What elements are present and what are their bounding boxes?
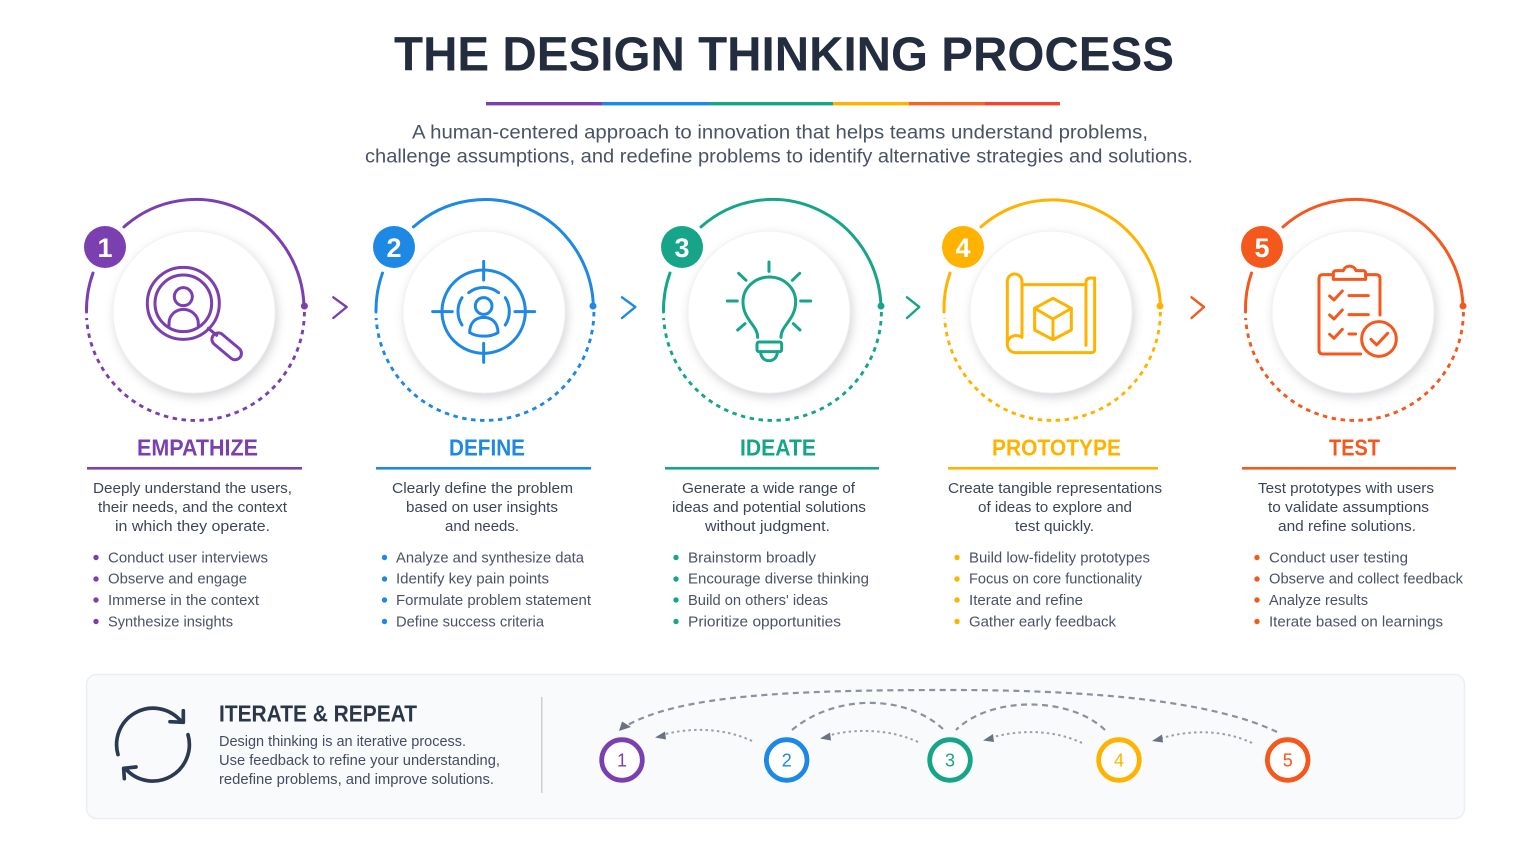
node 1: 1 [617,750,627,770]
inner disc 1 [113,231,275,393]
bullet list 2: Identify key pain points [396,572,549,588]
bullet list 1: Observe and engage [108,572,247,588]
node 3: 3 [945,750,955,770]
bullet list 4 [954,550,1150,630]
description 4: Create tangible representations [948,480,1162,497]
arrow 3 to 4 [907,297,919,318]
badge 4 [942,226,984,268]
bullet list 5 [1254,550,1464,630]
description: iterate: Design thinking is an iterative process. [219,734,466,750]
ring 1 [86,199,308,420]
arc 3 to 2 [792,703,943,730]
bullet list 2: Formulate problem statement [396,593,591,609]
description 2: Clearly define the problem [392,480,573,497]
panel: step 3 ideate [661,199,884,630]
bullet list 4: Build low-fidelity prototypes [969,550,1150,566]
description 2: and needs. [445,518,519,535]
description: iterate: Use feedback to refine your understanding, [219,753,500,769]
bullet list 1: Conduct user interviews [108,550,268,566]
underline 4 [948,467,1158,470]
description 5: to validate assumptions [1268,499,1429,516]
description 3: without judgment. [704,518,830,535]
badge 2 [373,226,415,268]
node 4 [1099,740,1139,780]
ring 3 [663,199,884,420]
bullet list 2: Define success criteria [396,614,545,630]
description 1: in which they operate. [115,518,270,535]
bullet list 1: Synthesize insights [108,614,233,630]
subtitle: A human-centered approach to innovation that helps teams understand problems, [412,123,1148,144]
long arc 5 to 1 [619,690,1277,732]
heading: define: DEFINE [449,434,525,460]
heading: iterate and repeat: ITERATE & REPEAT [219,700,417,726]
inner disc 3 [688,231,850,393]
badge 3 [661,226,703,268]
description 1 [93,480,292,535]
description 4: of ideas to explore and [978,499,1132,516]
description 1: Deeply understand the users, [93,480,292,497]
node 3 [930,740,970,780]
description: iterate [219,734,500,788]
description 5 [1258,480,1434,535]
heading: test: TEST [1329,434,1380,460]
icon: refresh loop [117,708,189,781]
description 4: test quickly. [1015,518,1094,535]
bullet list 5: Conduct user testing [1269,550,1408,566]
description 3 [672,480,866,535]
panel background [86,674,1464,818]
node 1 [602,740,642,780]
ring 2 [376,200,596,420]
node 4: 4 [1114,750,1124,770]
bullet list 3: Prioritize opportunities [688,614,841,630]
badge 1 [84,226,126,268]
node 5 [1267,740,1308,780]
badge 3: 3 [674,233,690,263]
badge 5 [1241,226,1283,268]
subtitle: challenge assumptions, and redefine problems to identify alternative strategies and solutions. [365,147,1193,168]
description 5: and refine solutions. [1278,518,1416,535]
dotted arrow 3 to 2 [820,731,918,742]
description 5: Test prototypes with users [1258,480,1434,497]
panel: step 4 prototype [942,200,1164,630]
panel: step 2 define [373,200,596,630]
panel: step 1 empathize [84,199,308,630]
inner disc 4 [970,231,1132,393]
description 3: Generate a wide range of [682,480,856,497]
inner disc 5 [1272,231,1434,393]
heading: prototype: PROTOTYPE [992,434,1121,460]
bullet list 1 [93,550,268,630]
loop diagram [602,690,1308,780]
arrow 1 to 2 [333,297,347,318]
node 2 [766,740,807,780]
bullet list 4: Gather early feedback [969,614,1117,630]
bullet list 1: Immerse in the context [108,593,259,609]
bullet list 3 [673,550,869,630]
bullet list 5: Iterate based on learnings [1269,614,1443,630]
panel: step 5 test [1241,199,1466,630]
heading: ideate: IDEATE [740,434,816,460]
bullet list 4: Focus on core functionality [969,572,1143,588]
dotted arrow 4 to 3 [983,732,1082,743]
description 2: based on user insights [406,499,558,516]
arrow 4 to 5 [1192,297,1204,318]
subtitle [365,123,1193,168]
ring 4 [944,200,1164,420]
underline 2 [376,467,591,470]
bullet list 3: Brainstorm broadly [688,550,817,566]
badge 2: 2 [386,233,402,263]
inner disc 2 [403,231,565,393]
badge 1: 1 [97,233,113,263]
badge 5: 5 [1254,233,1270,263]
icon: light bulb [727,262,811,361]
description 1: their needs, and the context [98,499,288,516]
title: THE DESIGN THINKING PROCESS [394,28,1174,82]
dotted arrow 2 to 1 [655,730,752,741]
icon: magnifier with user [147,267,244,362]
description 2 [392,480,573,535]
heading: empathize: EMPATHIZE [137,434,258,460]
description: iterate: redefine problems, and improve solutions. [219,772,494,788]
node 2: 2 [782,750,792,770]
bullet list 3: Encourage diverse thinking [688,572,869,588]
dotted arrow 5 to 4 [1152,732,1252,743]
badge 4: 4 [955,233,971,263]
bullet list 2: Analyze and synthesize data [396,550,585,566]
underline 1 [87,467,302,470]
ring 5 [1245,199,1466,420]
panel: iterate and repeat [86,674,1464,818]
bullet list 5: Observe and collect feedback [1269,572,1464,588]
node 5: 5 [1283,750,1293,770]
icon: clipboard with check [1319,266,1396,356]
icon: target with user [433,261,535,362]
description 3: ideas and potential solutions [672,499,866,516]
bullet list 4: Iterate and refine [969,593,1083,609]
arc 4 to 3 [956,704,1105,730]
description 4 [948,480,1162,535]
underline 3 [665,467,879,470]
bullet list 3: Build on others' ideas [688,593,828,609]
rainbow divider [486,102,1060,105]
bullet list 2 [382,550,591,630]
arrow 2 to 3 [622,297,635,318]
icon: blueprint with cube [1007,274,1095,353]
underline 5 [1242,467,1456,470]
bullet list 5: Analyze results [1269,593,1368,609]
